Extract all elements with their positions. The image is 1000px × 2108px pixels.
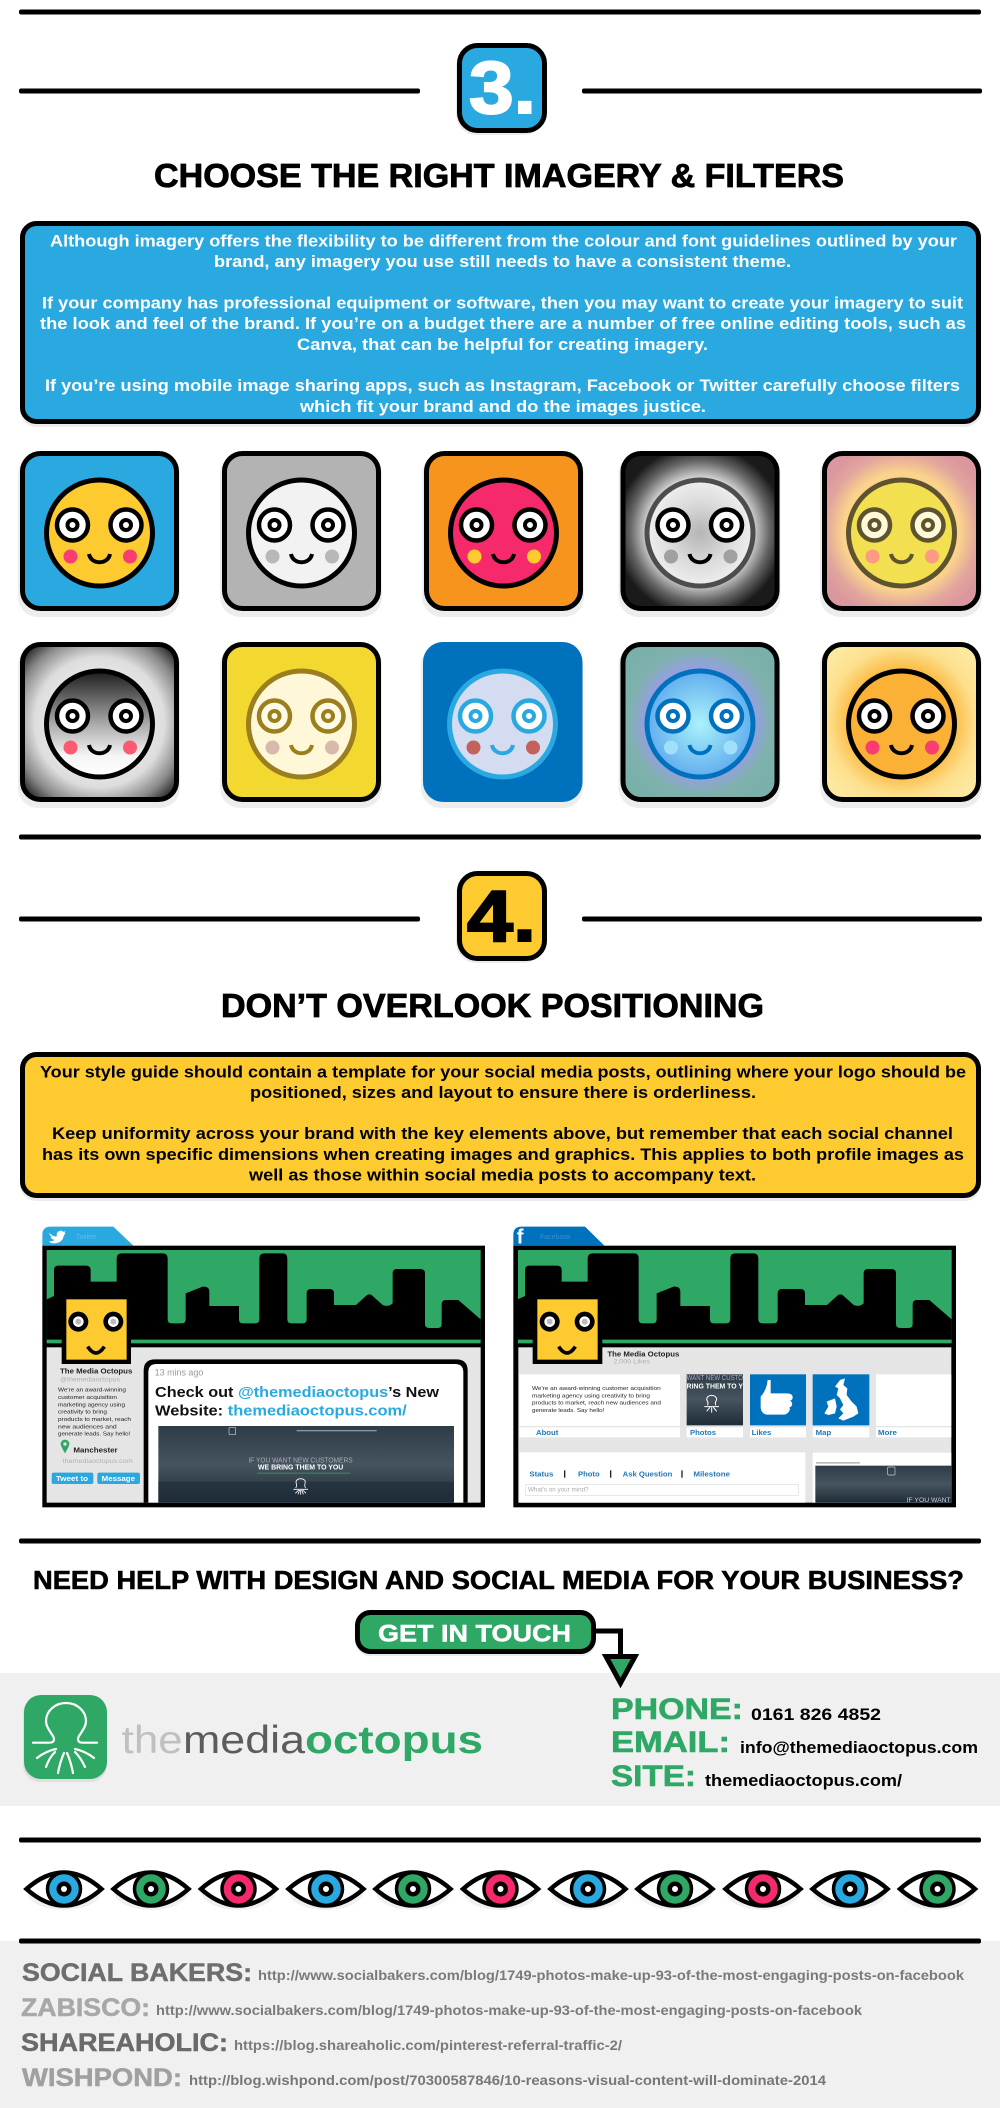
profile picture	[62, 1295, 131, 1364]
icon: face tile orange and pink	[422, 454, 584, 617]
panel: imagery text box	[20, 224, 981, 427]
profile text: @themediaoctopus	[60, 1376, 120, 1383]
profile text: We're an award-winning	[58, 1388, 126, 1394]
shared post	[813, 1453, 951, 1504]
icon: face tile original	[18, 454, 180, 617]
icon: face tile cool glow	[618, 644, 780, 808]
panel: positioning text box: has its own specific dimensions when creating images and graphics. This applies to both profile images as	[42, 1146, 964, 1164]
status composer: Ask Question	[623, 1469, 673, 1478]
source: shareaholic	[21, 2029, 622, 2057]
tweet card: IF YOU WANT NEW CUSTOMERS	[248, 1456, 353, 1465]
photos tile	[687, 1374, 743, 1437]
facebook tab: Facebook	[540, 1234, 571, 1241]
about card: marketing agency using creativity to bring	[532, 1393, 650, 1399]
profile text	[58, 1367, 132, 1438]
button: get in touch	[355, 1612, 596, 1656]
about card	[519, 1374, 680, 1437]
panel: facebook mockup	[513, 1226, 956, 1507]
status composer: Milestone	[693, 1469, 730, 1478]
panel: imagery text box: Canva, that can be helpful for creating imagery.	[297, 336, 708, 354]
panel: positioning text box: Keep uniformity across your brand with the key elements above, but remember that each social channel	[52, 1125, 953, 1143]
status composer: Status	[529, 1469, 553, 1478]
panel: facebook mockup: The Media Octopus	[607, 1349, 679, 1358]
divider: call to action rule	[19, 1538, 981, 1544]
tweet card: 13 mins ago	[155, 1367, 203, 1377]
icon: face tile mono gradient	[18, 644, 180, 808]
panel: contact band	[0, 1673, 1000, 1806]
contact details	[611, 1693, 978, 1793]
facebook tab	[513, 1226, 604, 1249]
map tile	[813, 1374, 869, 1437]
photos tile: WANT NEW CUSTO	[687, 1375, 743, 1382]
badge: number 4: 4.	[467, 877, 536, 957]
contact details: SITE:	[611, 1760, 696, 1793]
logo: wordmark: media	[183, 1719, 305, 1762]
more tile: More	[878, 1428, 897, 1437]
button: get in touch: GET IN TOUCH	[378, 1620, 571, 1648]
panel: positioning text box: positioned, sizes and layout to ensure there is orderliness.	[250, 1084, 756, 1102]
about card: products to market, reach new audiences and	[532, 1401, 661, 1407]
profile text: creativity to bring	[58, 1410, 107, 1416]
status composer	[519, 1452, 805, 1503]
profile text: new audiences and	[58, 1424, 117, 1430]
panel: twitter mockup: themediaoctopus.com	[63, 1458, 133, 1465]
logo: wordmark: octopus	[305, 1719, 483, 1762]
section 4 header rules	[19, 916, 982, 922]
source: wishpond: http://blog.wishpond.com/post/70300587846/10-reasons-visual-content-will-dominate-2014	[189, 2072, 826, 2088]
panel: imagery text box: Although imagery offers the flexibility to be different from the colour and font guidelines outlined by your	[50, 232, 958, 250]
map tile: Map	[816, 1428, 832, 1437]
contact details: PHONE:	[611, 1693, 743, 1726]
badge: number 3: 3.	[469, 46, 536, 129]
source: social bakers	[22, 1959, 964, 1987]
icon row: eyes	[26, 1872, 975, 1910]
profile text: products to market, reach	[58, 1417, 131, 1423]
divider: eyes top rule	[19, 1838, 981, 1842]
logo: wordmark	[122, 1719, 483, 1762]
panel: facebook mockup: 2,000 Likes	[613, 1358, 650, 1365]
profile picture	[533, 1295, 602, 1364]
photos tile: Photos	[690, 1428, 716, 1437]
panel: imagery text box: which fit your brand and do the images justice.	[299, 398, 706, 416]
profile text: marketing agency using	[58, 1402, 125, 1408]
section 3 header rules	[19, 88, 982, 94]
source: zabisco: ZABISCO:	[21, 1994, 150, 2022]
badge: number 3	[456, 46, 544, 135]
source: zabisco	[21, 1994, 862, 2022]
contact details: EMAIL:	[611, 1726, 730, 1759]
source: shareaholic: https://blog.shareaholic.com/pinterest-referral-traffic-2/	[234, 2037, 622, 2053]
source: wishpond: WISHPOND:	[22, 2064, 182, 2092]
skyline	[518, 1253, 952, 1340]
about card: We're an award-winning customer acquisition	[532, 1386, 661, 1392]
panel: twitter mockup	[42, 1227, 485, 1507]
icon: face tile amber glow	[820, 644, 982, 808]
status composer: Photo	[578, 1469, 600, 1478]
profile text: The Media Octopus	[60, 1367, 132, 1376]
divider: sources rule	[19, 1938, 981, 1944]
facebook tab: f	[517, 1226, 524, 1249]
tweet card: WE BRING THEM TO YOU	[258, 1465, 343, 1472]
logo: wordmark: the	[122, 1719, 183, 1762]
shared post: IF YOU WANT	[907, 1497, 951, 1504]
likes tile	[750, 1374, 806, 1437]
tweet card: Website: themediaoctopus.com/	[155, 1404, 407, 1420]
about card: About	[536, 1428, 559, 1437]
source: social bakers: http://www.socialbakers.com/blog/1749-photos-make-up-93-of-the-most-engaging-posts-on-facebook	[258, 1967, 964, 1983]
panel: positioning text box	[20, 1054, 981, 1201]
panel: imagery text box: brand, any imagery you use still needs to have a consistent theme.	[214, 253, 791, 271]
photos tile: RING THEM TO Y	[687, 1383, 743, 1390]
icon: face tile blue invert	[421, 642, 583, 808]
buttons: Tweet to	[56, 1476, 88, 1483]
heading: need help: NEED HELP WITH DESIGN AND SOCIAL MEDIA FOR YOUR BUSINESS?	[33, 1565, 964, 1595]
contact details: themediaoctopus.com/	[705, 1771, 902, 1790]
contact details: 0161 826 4852	[751, 1705, 881, 1724]
panel: sources band	[0, 1941, 1000, 2108]
source: shareaholic: SHAREAHOLIC:	[21, 2029, 228, 2057]
icon: face tile greyscale	[220, 454, 382, 617]
icon: face tile yellow wash	[220, 644, 382, 808]
profile text: customer acquisition	[58, 1395, 117, 1401]
tweet card	[144, 1359, 468, 1503]
about card: generate leads. Say hello!	[532, 1408, 605, 1414]
skyline	[47, 1253, 481, 1340]
source: wishpond	[22, 2064, 826, 2092]
buttons	[52, 1473, 140, 1484]
panel: positioning text box: well as those within social media posts to accompany text.	[248, 1166, 756, 1184]
twitter tab: Twitter	[76, 1234, 97, 1241]
status composer: What's on your mind?	[528, 1488, 589, 1494]
panel: imagery text box: If you’re using mobile image sharing apps, such as Instagram, Facebook or Twitter carefully choose filters	[45, 377, 960, 395]
icon: face tile dark vignette	[618, 454, 780, 617]
badge: number 4	[456, 874, 544, 963]
buttons: Message	[102, 1476, 135, 1483]
logo: octopus icon	[23, 1695, 107, 1782]
tweet card: Check out @themediaoctopus ’s New	[155, 1385, 440, 1401]
heading: choose the right imagery: CHOOSE THE RIGHT IMAGERY & FILTERS	[154, 158, 844, 195]
panel: imagery text box: If your company has professional equipment or software, then you may want to create your imagery to suit	[42, 294, 964, 312]
source: zabisco: http://www.socialbakers.com/blog/1749-photos-make-up-93-of-the-most-engaging-posts-on-facebook	[156, 2002, 862, 2018]
twitter tab	[42, 1227, 133, 1246]
arrow: button to contact details	[596, 1631, 635, 1683]
panel: twitter mockup: Manchester	[73, 1448, 118, 1455]
divider: section 4 top rule	[19, 834, 981, 840]
divider: top rule	[19, 10, 981, 14]
panel: imagery text box: the look and feel of the brand. If you’re on a budget there are a number of free online editing tools, such as	[40, 315, 966, 333]
icon: location pin	[61, 1440, 69, 1453]
panel: positioning text box: Your style guide should contain a template for your social media posts, outlining where your logo should be	[40, 1064, 966, 1082]
heading: don't overlook positioning: DON’T OVERLOOK POSITIONING	[221, 988, 764, 1025]
more tile	[876, 1374, 951, 1437]
contact details: info@themediaoctopus.com	[740, 1738, 978, 1757]
profile text: generate leads. Say hello!	[58, 1432, 131, 1438]
icon: face tile warm fade	[820, 454, 982, 617]
source: social bakers: SOCIAL BAKERS:	[22, 1959, 252, 1987]
likes tile: Likes	[752, 1428, 771, 1437]
